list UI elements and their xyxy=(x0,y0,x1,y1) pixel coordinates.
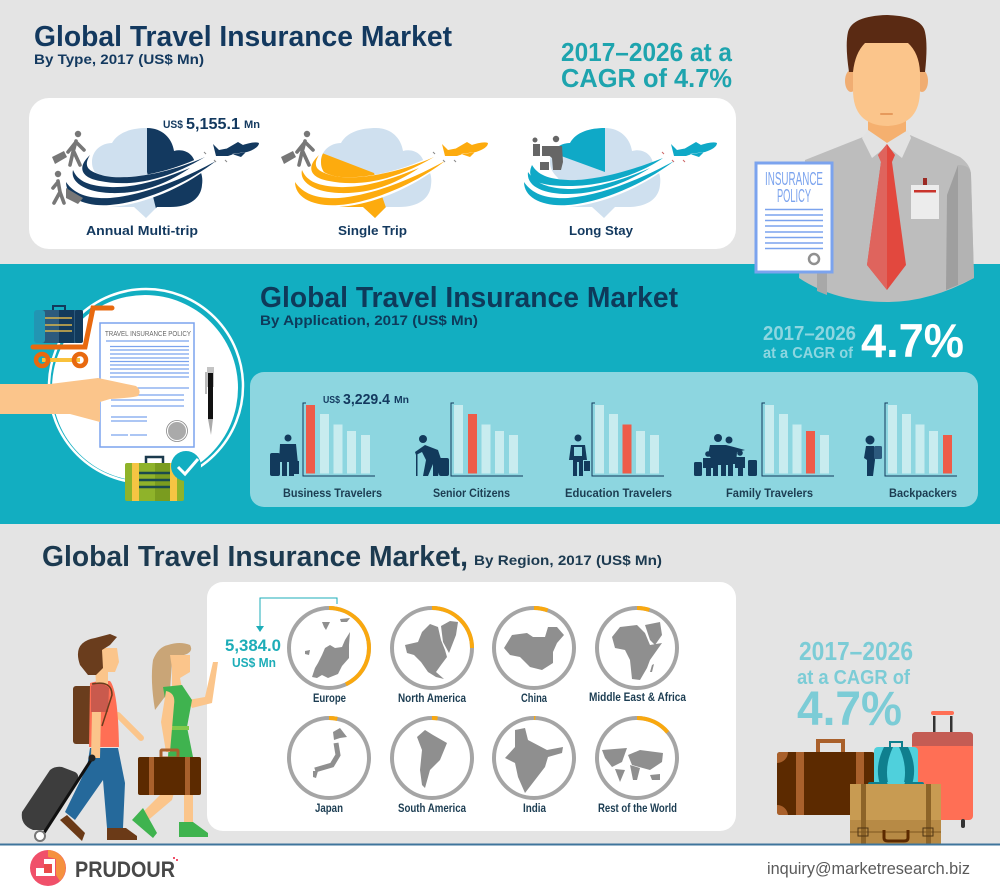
panel: by region xyxy=(207,582,736,831)
title: by region: By Region, 2017 (US$ Mn) xyxy=(474,552,662,568)
logo accent xyxy=(173,857,178,861)
region: South America: South America xyxy=(398,803,467,815)
trailing arm xyxy=(118,715,141,738)
label: Education Travelers xyxy=(565,486,672,500)
title: by type xyxy=(34,21,452,67)
annual multi-trip value: 5,155.1 xyxy=(186,116,240,133)
torso xyxy=(89,681,119,747)
title: by type: Global Travel Insurance Market xyxy=(34,21,452,53)
value xyxy=(323,391,409,408)
face xyxy=(853,40,920,126)
CAGR callout bottom xyxy=(797,636,913,736)
torso xyxy=(799,135,974,302)
region: China xyxy=(494,608,574,705)
region: North America: North America xyxy=(398,693,467,705)
CAGR callout bottom: 2017–2026 xyxy=(799,636,913,666)
footer xyxy=(0,844,1000,893)
collar xyxy=(862,130,911,158)
hand xyxy=(0,378,140,422)
logo wordmark: PRUDOUR xyxy=(75,857,175,882)
illustration: travelers xyxy=(22,634,218,841)
region: India: India xyxy=(523,803,547,815)
CAGR callout middle xyxy=(763,314,964,367)
chart: backpackers xyxy=(864,403,957,476)
tan suitcase xyxy=(850,784,941,844)
backpack xyxy=(73,686,93,744)
coral suitcase xyxy=(912,711,973,828)
region: Rest of the World xyxy=(597,718,677,815)
label: Annual Multi-trip xyxy=(86,223,198,238)
suitcase xyxy=(138,757,201,795)
icon: senior citizen xyxy=(415,435,449,476)
value callout with arrow xyxy=(225,598,337,670)
title: by application: By Application, 2017 (US$ Mn) xyxy=(260,312,478,328)
cart with luggage xyxy=(33,306,112,366)
chart: family travelers xyxy=(694,403,834,476)
document xyxy=(100,323,194,447)
label: Senior Citizens xyxy=(433,486,510,500)
title: by region: Global Travel Insurance Market, xyxy=(42,541,468,573)
region: North America xyxy=(392,608,472,705)
pen xyxy=(205,367,214,435)
sleeve and arm xyxy=(91,683,109,712)
label: Long Stay xyxy=(569,223,634,238)
tie xyxy=(867,144,906,290)
chart: education travelers xyxy=(569,403,664,476)
value callout with arrow: US$ Mn xyxy=(232,655,276,670)
CAGR callout bottom: 4.7% xyxy=(797,683,902,736)
top section background xyxy=(0,0,1000,264)
CAGR callout middle: at a CAGR of xyxy=(763,345,854,362)
title: by application: Global Travel Insurance Market xyxy=(260,282,678,314)
contact email: inquiry@marketresearch.biz xyxy=(767,859,970,878)
value: US$ xyxy=(323,394,340,406)
chart: business travelers xyxy=(270,403,375,476)
panel: by type xyxy=(29,98,736,249)
brown suitcase xyxy=(777,741,875,815)
label: Backpackers xyxy=(889,486,957,500)
region: India xyxy=(494,718,574,815)
CAGR callout top xyxy=(561,37,733,93)
icon: single trip cloud xyxy=(281,128,488,225)
CAGR callout bottom: at a CAGR of xyxy=(797,667,910,689)
check badge xyxy=(171,451,201,481)
annual multi-trip value: Mn xyxy=(244,119,260,131)
green suitcase xyxy=(125,457,184,501)
icon: business traveler xyxy=(270,434,299,476)
panel: by application xyxy=(250,372,978,507)
illustration: policy in hand xyxy=(0,289,243,501)
trousers xyxy=(65,748,125,828)
document: TRAVEL INSURANCE POLICY xyxy=(105,331,191,338)
region: Europe: Europe xyxy=(313,693,346,705)
shoes xyxy=(60,815,85,841)
icon: long stay cloud xyxy=(522,120,717,218)
annual multi-trip value xyxy=(163,116,260,133)
teal bag xyxy=(868,742,924,800)
middle section background xyxy=(0,264,1000,524)
label: Family Travelers xyxy=(726,486,813,500)
region: China: China xyxy=(521,693,547,705)
CAGR callout middle: 2017–2026 xyxy=(763,323,856,345)
document: insurance policy: POLICY xyxy=(777,186,811,206)
bottom section background xyxy=(0,524,1000,845)
CAGR callout top: CAGR of 4.7% xyxy=(561,63,732,93)
strap xyxy=(92,683,112,726)
label: Business Travelers xyxy=(283,486,382,500)
title: by type: By Type, 2017 (US$ Mn) xyxy=(34,51,204,67)
annual multi-trip value: US$ xyxy=(163,119,183,131)
value: 3,229.4 xyxy=(343,391,391,408)
man xyxy=(22,634,141,841)
region: Rest of the World: Rest of the World xyxy=(598,803,677,815)
region: Middle East and Africa: Middle East & Africa xyxy=(589,692,687,704)
value: Mn xyxy=(394,394,409,406)
chart: senior citizens xyxy=(415,403,523,476)
CAGR callout middle: 4.7% xyxy=(861,314,964,367)
circle xyxy=(52,295,238,481)
icon: backpacker xyxy=(864,436,882,476)
document: insurance policy: INSURANCE xyxy=(765,169,823,189)
document: insurance policy xyxy=(756,163,832,272)
ears xyxy=(845,70,928,92)
logo mark xyxy=(30,850,66,886)
badge xyxy=(911,178,939,219)
neck xyxy=(868,108,906,144)
region: Japan xyxy=(289,718,369,815)
icon: family xyxy=(694,434,757,476)
illustration: luggage stack xyxy=(777,711,973,844)
hair xyxy=(847,15,926,72)
illustration: agent with insurance policy xyxy=(756,15,974,302)
title: by application xyxy=(260,282,678,328)
icon: student xyxy=(569,434,590,476)
region: South America xyxy=(392,718,472,815)
label: Single Trip xyxy=(338,223,407,238)
rolling luggage xyxy=(22,767,78,830)
region: Japan: Japan xyxy=(315,803,343,815)
woman xyxy=(132,643,218,838)
value callout with arrow: 5,384.0 xyxy=(225,636,281,655)
region: Europe xyxy=(289,608,369,705)
CAGR callout top: 2017–2026 at a xyxy=(561,37,733,67)
icon: annual multi-trip cloud xyxy=(51,128,259,218)
head xyxy=(94,648,119,684)
region: Middle East and Africa xyxy=(589,608,687,704)
